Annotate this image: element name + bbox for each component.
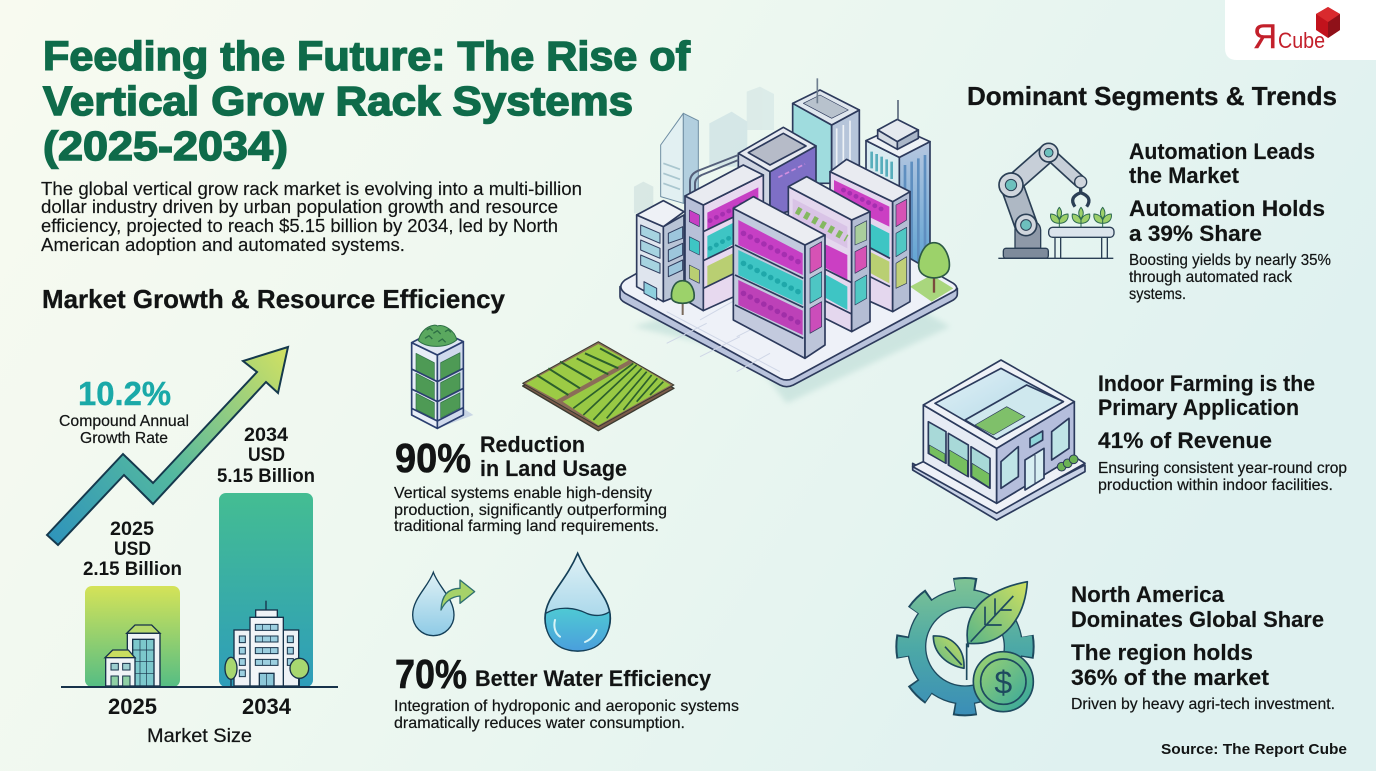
icon: large water drop — [545, 553, 610, 651]
segment: automation: a 39% Share — [1129, 221, 1262, 246]
label: 2025 value: 2.15 Billion — [83, 559, 182, 580]
segment: automation: Automation Leads — [1129, 139, 1315, 164]
icon: gear, leaf and coin — [903, 582, 1033, 712]
segment: north america — [1071, 582, 1335, 713]
icon: buildings 2025 — [105, 625, 160, 686]
label: 2025 value — [83, 519, 182, 580]
stat: land usage: Reduction — [480, 432, 585, 457]
icon: farm field — [523, 342, 674, 431]
segment: automation: the Market — [1129, 163, 1239, 188]
stat: water efficiency: Better Water Efficiency — [475, 666, 711, 691]
label: 2034 value: 2034 — [244, 425, 288, 446]
label: 2034 value: 5.15 Billion — [217, 466, 315, 487]
source: Source: The Report Cube — [1161, 741, 1347, 758]
stat: water efficiency: Integration of hydroponic and aeroponic systems — [394, 698, 739, 715]
segment: north america: The region holds — [1071, 640, 1253, 665]
intro paragraph: The global vertical grow rack market is evolving into a multi-billion — [41, 179, 582, 199]
segment: automation — [1129, 139, 1331, 303]
stat: land usage: traditional farming land requirements. — [394, 518, 659, 535]
rack: right back — [830, 159, 910, 312]
CAGR callout: Growth Rate — [80, 430, 168, 447]
logo: RCube: Cube — [1278, 28, 1325, 53]
stat: water efficiency: dramatically reduces water consumption. — [394, 715, 685, 732]
intro paragraph: dollar industry driven by urban population growth and resource — [41, 197, 558, 217]
icon: gear, leaf and coin: $ — [994, 664, 1012, 700]
segment: indoor farming: Ensuring consistent year-round crop — [1098, 460, 1347, 477]
arrow: growth — [47, 347, 288, 545]
title: Vertical Grow Rack Systems — [43, 78, 633, 124]
segment: north america: North America — [1071, 582, 1224, 607]
rack: back purple — [738, 127, 816, 217]
segment: automation: through automated rack — [1129, 269, 1293, 286]
axis labels: Market Size — [147, 726, 252, 747]
stat: land usage: production, significantly outperforming — [394, 502, 667, 519]
logo: RCube: Я — [1253, 18, 1277, 56]
intro paragraph: efficiency, projected to reach $5.15 billion by 2034, led by North — [41, 216, 558, 236]
label: 2025 value: USD — [114, 539, 151, 560]
rack: center right — [788, 177, 870, 332]
segment: automation: Automation Holds — [1129, 196, 1325, 221]
segment: north america: Driven by heavy agri-tech investment. — [1071, 696, 1335, 713]
tree: right — [919, 243, 949, 293]
icon: greenhouse — [913, 360, 1085, 520]
stat: land usage: 90% — [395, 435, 471, 481]
label: 2025 value: 2025 — [110, 519, 154, 540]
teal tower — [793, 78, 859, 183]
stat: water efficiency — [394, 651, 739, 732]
stat: land usage — [394, 432, 667, 535]
stat: land usage: Vertical systems enable high-density — [394, 485, 652, 502]
stat: land usage: in Land Usage — [480, 456, 627, 481]
label: 2034 value — [217, 425, 315, 487]
tree: left — [671, 281, 694, 315]
rack: left — [685, 165, 763, 311]
shadow — [633, 303, 950, 403]
icon: buildings 2034 — [225, 601, 309, 686]
segment: north america: Dominates Global Share — [1071, 607, 1324, 632]
logo: RCube — [1225, 0, 1376, 60]
small building — [637, 201, 684, 302]
axis labels: 2025 — [108, 694, 157, 719]
title: Feeding the Future: The Rise of — [43, 33, 690, 79]
axis labels — [108, 694, 292, 747]
CAGR callout: Compound Annual — [59, 413, 189, 430]
icon: vertical tower — [412, 325, 473, 428]
title: (2025-2034) — [43, 123, 288, 169]
pale tower — [661, 113, 698, 203]
intro paragraph: American adoption and automated systems. — [41, 235, 405, 255]
faded skyline — [634, 87, 774, 213]
icon: robot arm — [998, 143, 1114, 258]
segment: indoor farming: production within indoor facilities. — [1098, 477, 1333, 494]
segment: indoor farming — [1098, 371, 1347, 494]
chart: market size bars — [61, 493, 338, 688]
segment: automation: systems. — [1129, 286, 1186, 303]
CAGR callout: 10.2% — [78, 375, 171, 412]
stat: water efficiency: 70% — [395, 651, 467, 697]
right tower — [866, 100, 930, 290]
segment: indoor farming: Primary Application — [1098, 395, 1299, 420]
segment: north america: 36% of the market — [1071, 665, 1270, 690]
baseline — [61, 686, 338, 688]
bar: 2034 — [219, 493, 313, 687]
segment: indoor farming: 41% of Revenue — [1098, 428, 1272, 453]
heading: market growth: Market Growth & Resource Efficiency — [42, 284, 506, 314]
pipe — [690, 155, 738, 193]
heading: dominant segments: Dominant Segments & Trends — [967, 81, 1337, 111]
axis labels: 2034 — [242, 694, 292, 719]
platform — [620, 193, 957, 387]
bar: 2025 — [85, 586, 180, 687]
rack: front — [733, 197, 825, 358]
segment: automation: Boosting yields by nearly 35% — [1129, 252, 1331, 269]
intro paragraph — [41, 179, 582, 255]
icon: small water drop with arrow — [413, 572, 475, 636]
title — [43, 33, 690, 169]
CAGR callout — [59, 375, 189, 447]
segment: indoor farming: Indoor Farming is the — [1098, 371, 1315, 396]
illustration: isometric vertical farm city — [620, 78, 957, 403]
label: 2034 value: USD — [248, 445, 285, 466]
